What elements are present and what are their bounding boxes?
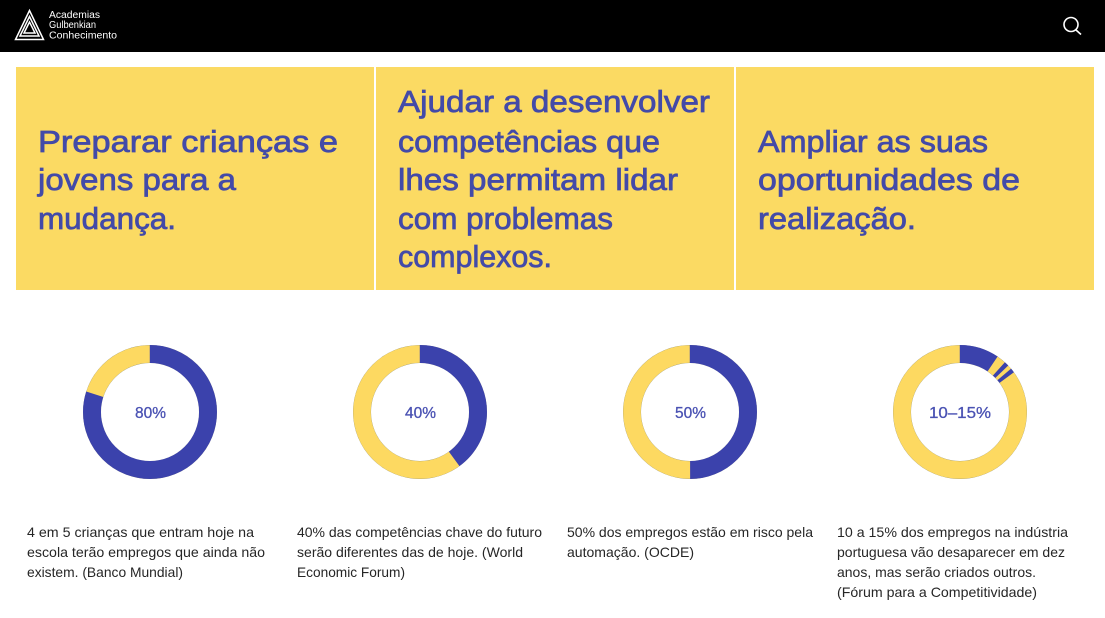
heading: oportunidades de: [758, 162, 1020, 197]
heading: jovens para a: [37, 162, 237, 197]
panel: preparar: [16, 67, 374, 290]
donut chart: 40%: 40%: [405, 405, 436, 422]
donut chart: 10-15%: [893, 345, 1027, 479]
logo text: Gulbenkian: [49, 20, 96, 31]
logo text: [49, 10, 117, 42]
panel: ajudar: [376, 67, 734, 290]
text block: banco mundial: 4 em 5 crianças que entram hoje na: [27, 524, 254, 540]
heading: [37, 124, 338, 236]
heading: [398, 84, 710, 274]
panel: ampliar: [736, 67, 1094, 290]
heading: competências que: [398, 124, 660, 159]
donut chart: 40%: [353, 345, 487, 479]
text block: forum competitividade: anos, mas serão criados outros.: [837, 564, 1036, 580]
text block: world economic forum: Economic Forum): [297, 564, 405, 580]
text block: banco mundial: [27, 524, 265, 580]
text block: world economic forum: 40% das competências chave do futuro: [297, 524, 542, 540]
heading: Ampliar as suas: [758, 124, 988, 159]
text block: ocde: automação. (OCDE): [567, 544, 694, 560]
donut chart: 80%: 80%: [135, 405, 166, 422]
text block: banco mundial: existem. (Banco Mundial): [27, 564, 183, 580]
text block: forum competitividade: [837, 524, 1068, 600]
header bar: [0, 0, 1105, 52]
logo text: Academias: [49, 10, 100, 21]
text block: world economic forum: [297, 524, 542, 580]
heading: com problemas: [398, 201, 613, 236]
logo text: Conhecimento: [49, 30, 117, 42]
text block: forum competitividade: (Fórum para a Competitividade): [837, 584, 1037, 600]
text block: forum competitividade: portuguesa vão desaparecer em dez: [837, 544, 1065, 560]
text block: banco mundial: escola terão empregos que ainda não: [27, 544, 265, 560]
heading: Preparar crianças e: [38, 124, 338, 159]
donut chart: 80%: [83, 345, 217, 479]
heading: Ajudar a desenvolver: [398, 84, 710, 119]
text block: forum competitividade: 10 a 15% dos empregos na indústria: [837, 524, 1068, 540]
icon: nested triangles: [16, 10, 44, 40]
heading: [758, 124, 1020, 236]
text block: ocde: [567, 524, 813, 560]
donut chart: 50%: [623, 345, 757, 479]
logo: [16, 10, 117, 42]
heading: lhes permitam lidar: [398, 162, 678, 197]
text block: world economic forum: serão diferentes das de hoje. (World: [297, 544, 523, 560]
heading: mudança.: [38, 201, 176, 236]
heading: complexos.: [398, 239, 552, 274]
donut chart: 50%: 50%: [675, 405, 706, 422]
text block: ocde: 50% dos empregos estão em risco pela: [567, 524, 813, 540]
heading: realização.: [758, 201, 916, 236]
donut chart: 10-15%: 10–15%: [929, 405, 991, 422]
icon: search: [1064, 18, 1081, 34]
